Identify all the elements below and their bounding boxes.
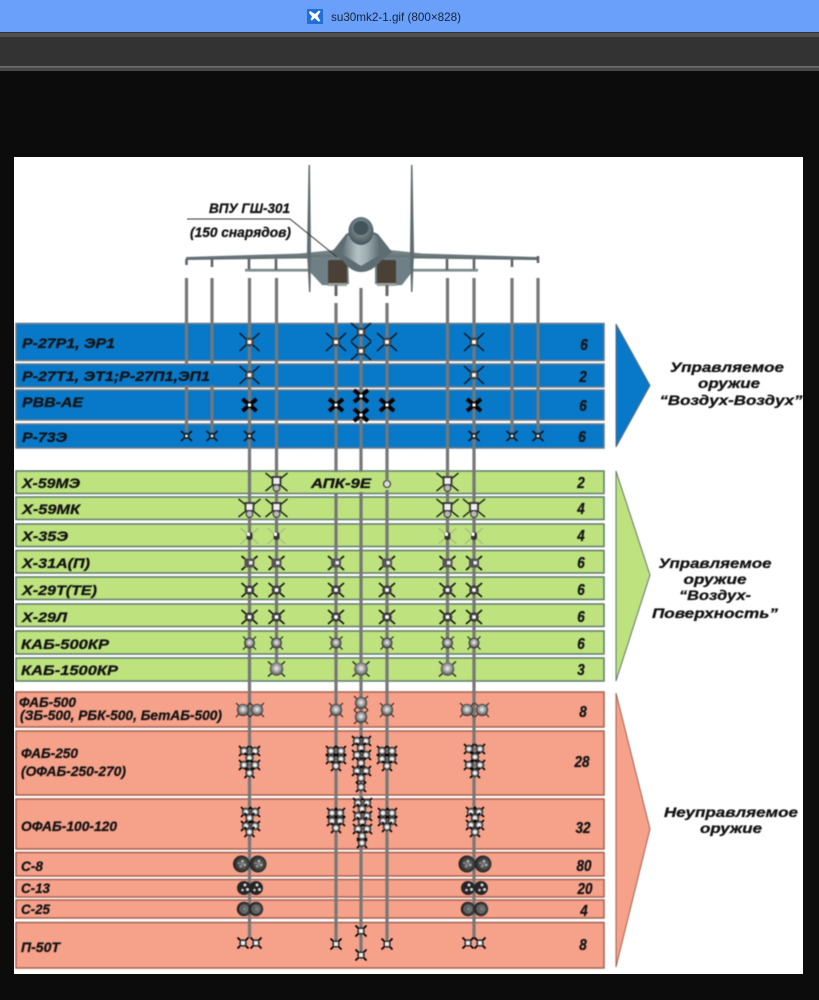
row: Р-27Р1, ЭР1 — [22, 323, 588, 360]
row: П-50Т — [21, 926, 587, 960]
row: ОФАБ-100-120 — [21, 798, 591, 848]
row: Х-29Т(ТЕ): 6 — [577, 582, 585, 599]
row: Х-31А(П): Х-31А(П) — [21, 555, 90, 571]
row: Х-29Т(ТЕ) — [21, 582, 585, 599]
heading: air-to-air guided weapons: оружие — [698, 376, 761, 391]
row: С-8 — [21, 856, 592, 875]
heading: unguided weapons — [664, 805, 799, 836]
row: С-25 — [21, 901, 588, 920]
row: П-50Т: 8 — [579, 937, 587, 954]
heading: air-to-air guided weapons: Управляемое — [670, 360, 785, 375]
row: Х-35Э: 4 — [576, 528, 585, 545]
heading: air-to-surface guided weapons: оружие — [684, 572, 747, 587]
row: Р-73Э: Р-73Э — [22, 429, 67, 445]
row: Х-59МЭ and АПК-9Е: Х-59МЭ — [21, 475, 80, 491]
row: Р-27Р1, ЭР1: 6 — [580, 337, 588, 354]
row: ОФАБ-100-120: ОФАБ-100-120 — [21, 819, 118, 834]
row: Х-59МЭ and АПК-9Е — [21, 473, 585, 492]
row: ФАБ-500 — [19, 695, 587, 724]
heading: air-to-surface guided weapons: Управляемое — [658, 556, 772, 571]
row: ФАБ-250: 28 — [574, 754, 590, 771]
row: Х-29Т(ТЕ): Х-29Т(ТЕ) — [21, 582, 97, 598]
row: С-25: С-25 — [21, 901, 50, 917]
row: КАБ-500КР — [21, 636, 585, 653]
callout: ВПУ ГШ-301 gun — [187, 201, 337, 257]
row: КАБ-1500КР — [21, 662, 585, 679]
row: Х-59МЭ and АПК-9Е: 2 — [576, 475, 585, 492]
pylon drop lines — [186, 278, 538, 955]
row: Х-31А(П): 6 — [577, 555, 585, 572]
row: Х-35Э: Х-35Э — [21, 528, 68, 544]
heading: air-to-surface guided weapons: Поверхность” — [652, 606, 778, 621]
arrow: unguided bracket — [616, 693, 650, 967]
heading: unguided weapons: оружие — [700, 821, 763, 836]
heading: air-to-surface guided weapons: “Воздух- — [679, 588, 752, 603]
row: РВВ-АЕ: РВВ-АЕ — [22, 394, 84, 410]
row: КАБ-500КР: КАБ-500КР — [21, 636, 110, 652]
row: ФАБ-500: ФАБ-500 — [19, 695, 76, 710]
row: Х-29Л: 6 — [577, 609, 585, 626]
row: РВВ-АЕ — [22, 390, 587, 421]
window title text: su30mk2-1.gif (800×828) — [331, 10, 461, 24]
white image area — [14, 157, 803, 974]
row: Х-59МК: 4 — [576, 501, 585, 518]
callout: ВПУ ГШ-301 gun: (150 снарядов) — [190, 225, 291, 240]
row: Х-59МК: Х-59МК — [21, 501, 82, 517]
row: С-13: С-13 — [21, 880, 50, 896]
row: П-50Т: П-50Т — [21, 939, 61, 955]
aircraft front view — [186, 165, 538, 296]
row: Р-27Р1, ЭР1: Р-27Р1, ЭР1 — [22, 335, 115, 351]
row: С-25: 4 — [579, 903, 588, 920]
row: С-13: 20 — [577, 881, 593, 898]
heading: air-to-air guided weapons — [660, 360, 803, 408]
row: РВВ-АЕ: 6 — [579, 398, 587, 415]
window title bar — [0, 0, 819, 32]
row: КАБ-500КР: 6 — [577, 636, 585, 653]
row: ФАБ-250: (ОФАБ-250-270) — [21, 764, 127, 779]
row: ФАБ-500: (ЗБ-500, РБК-500, БетАБ-500) — [20, 708, 223, 723]
row: Р-73Э: 6 — [578, 429, 586, 446]
row: Х-59МК — [21, 499, 585, 518]
row: Х-31А(П) — [21, 555, 585, 572]
heading: air-to-surface guided weapons — [652, 556, 778, 621]
heading: air-to-air guided weapons: “Воздух-Воздух” — [660, 393, 803, 408]
row: С-8: С-8 — [21, 858, 43, 874]
callout: ВПУ ГШ-301 gun: ВПУ ГШ-301 — [209, 201, 290, 216]
infographic image — [16, 165, 803, 968]
row: Р-27Т1, ЭТ1;Р-27П1,ЭП1: Р-27Т1, ЭТ1;Р-27П1,ЭП1 — [22, 368, 210, 384]
viewer toolbar — [0, 32, 819, 71]
icon: plane file icon — [307, 9, 323, 24]
row: КАБ-1500КР: 3 — [577, 662, 585, 679]
row: ФАБ-500: 8 — [579, 704, 587, 721]
row: Х-59МЭ and АПК-9Е: АПК-9Е — [310, 475, 372, 491]
row: Р-27Т1, ЭТ1;Р-27П1,ЭП1 — [22, 366, 587, 386]
row: Х-35Э — [21, 528, 585, 545]
row: Х-29Л — [21, 609, 585, 626]
row: Р-73Э — [22, 429, 586, 446]
row: КАБ-1500КР: КАБ-1500КР — [21, 662, 119, 678]
panel: air-to-surface rows — [16, 471, 604, 681]
heading: unguided weapons: Неуправляемое — [664, 805, 799, 820]
row: Х-29Л: Х-29Л — [21, 609, 67, 625]
arrow: air-to-surface bracket — [616, 471, 650, 681]
row: ОФАБ-100-120: 32 — [576, 820, 591, 837]
panel: unguided weapon rows — [16, 692, 604, 968]
row: ФАБ-250: ФАБ-250 — [21, 746, 78, 761]
row: ФАБ-250 — [21, 736, 590, 792]
panel: air-to-air rows — [16, 324, 604, 448]
arrow: air-to-air bracket — [616, 324, 650, 447]
row: С-8: 80 — [576, 858, 592, 875]
row: Р-27Т1, ЭТ1;Р-27П1,ЭП1: 2 — [578, 369, 587, 386]
row: С-13 — [21, 880, 593, 898]
